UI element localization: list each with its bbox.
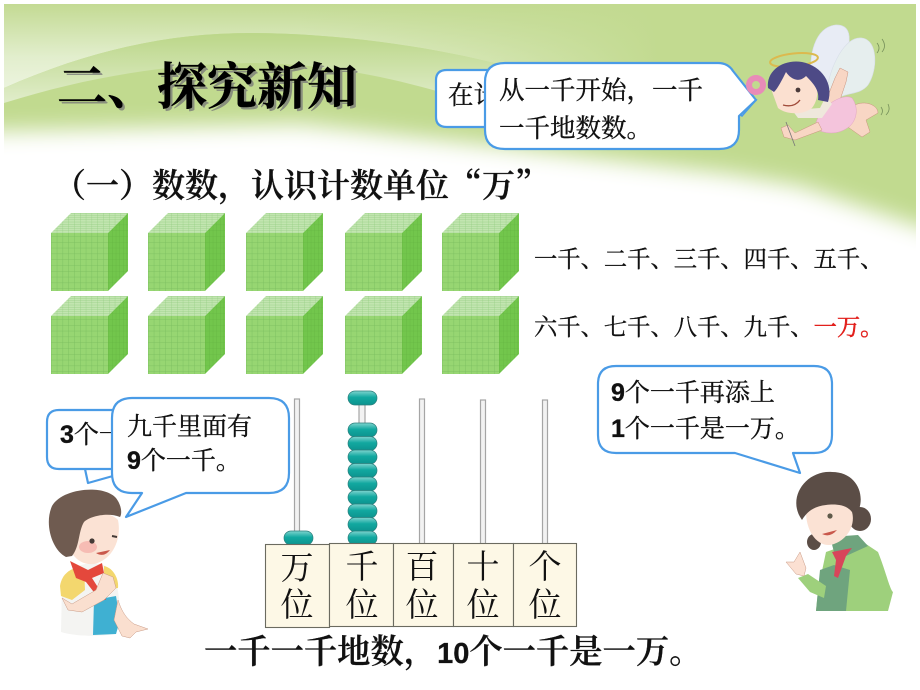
callout: nine plus one thousand: 9个一千再添上 — [611, 373, 775, 409]
callout: hidden rear bubble left: 3个一 — [60, 415, 124, 451]
callout: count by thousands: 从一千开始，一千 — [499, 71, 703, 107]
callout: nine plus one thousand: 1个一千是一万。 — [611, 409, 800, 445]
place value labels: 位 — [280, 579, 314, 626]
cube row 2 — [51, 296, 519, 374]
place value labels: 位 — [406, 579, 438, 626]
motion marks — [877, 39, 889, 115]
title: 二、探究新知 — [57, 47, 357, 119]
icon: fairy legs — [845, 103, 878, 137]
boy face — [62, 513, 119, 564]
boy hair — [49, 490, 121, 557]
place value labels: 个 — [528, 541, 562, 588]
boy scarf — [70, 561, 106, 600]
place value labels: 位 — [466, 579, 500, 626]
callout: nine plus one thousand — [598, 366, 832, 473]
icon: fairy hair — [768, 62, 830, 102]
summary sentence: 一千一千地数，10个一千是一万。 — [204, 625, 702, 673]
text: counting row 2: 六千、七千、八千、九千、一万。 — [534, 308, 883, 342]
text: counting row 1: 一千、二千、三千、四千、五千、 — [534, 240, 883, 274]
page background — [4, 4, 916, 240]
place value labels: 位 — [346, 579, 378, 626]
icon: fairy halo — [769, 51, 819, 69]
callout: nine thousand: 9个一千。 — [127, 441, 241, 477]
place value labels: 千 — [346, 541, 378, 588]
callout: hidden rear bubble: 在计 — [448, 76, 499, 112]
girl dress and jacket — [816, 540, 893, 611]
boy sleeves — [60, 568, 85, 600]
girl scarf — [832, 548, 852, 578]
abacus rods — [294, 399, 548, 545]
icon: boy — [49, 490, 148, 638]
callout: count by thousands: 一千地数数。 — [499, 109, 652, 145]
cube row 1 — [51, 213, 519, 291]
icon: fairy lower arm — [781, 122, 822, 140]
girl pigtails — [849, 507, 871, 531]
place value labels: 位 — [528, 579, 562, 626]
beads in ten-thousands place — [284, 531, 313, 545]
boy arms and hands — [62, 573, 116, 612]
icon: fairy raised arm — [824, 68, 848, 112]
icon: pink flower — [749, 78, 763, 92]
callout: nine thousand — [112, 398, 289, 517]
girl hair — [796, 472, 861, 520]
callout: hidden rear bubble — [436, 70, 756, 127]
cube grid: ten thousand-cubes — [51, 213, 519, 374]
icon: fairy wings — [811, 25, 875, 105]
girl face — [806, 503, 853, 545]
icon: fairy dress — [814, 97, 856, 133]
place value labels: 万 — [280, 542, 314, 589]
place value labels — [266, 541, 576, 628]
girl arm and hand — [798, 574, 826, 598]
place value labels: 百 — [406, 541, 438, 588]
callout: hidden rear bubble left — [47, 410, 130, 483]
icon: flying fairy — [749, 25, 889, 146]
abacus — [266, 391, 576, 628]
heading: section subtitle: （一）数数，认识计数单位“万” — [53, 160, 548, 207]
boy torso — [61, 564, 120, 636]
icon: girl — [786, 472, 893, 611]
beads in thousands place — [348, 391, 377, 545]
place value labels: 十 — [466, 541, 500, 588]
callout: count by thousands — [485, 63, 756, 149]
icon: fairy head — [770, 67, 817, 113]
icon: fairy collar — [792, 96, 832, 118]
callout: nine thousand: 九千里面有 — [127, 407, 252, 443]
title: 二、探究新知 — [60, 50, 360, 122]
